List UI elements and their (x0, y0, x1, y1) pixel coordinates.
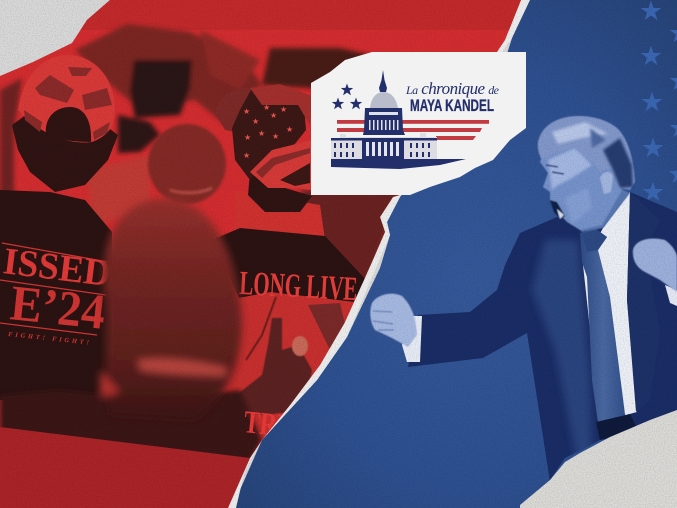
left man dark T-shirt (0, 190, 112, 400)
head (538, 116, 635, 232)
shirt slogan left: ISSED (1, 240, 113, 295)
stars column (639, 0, 677, 208)
left man hair (12, 112, 118, 192)
stars column: ★ (641, 133, 665, 164)
left fist (370, 294, 417, 347)
chronique heading: La chronique de (405, 79, 500, 98)
suit lighter front (532, 240, 592, 465)
torn white paper strip (224, 0, 530, 508)
shirt slogan left: E’24 (8, 274, 108, 340)
cap stars: ★ (263, 103, 270, 112)
capitol building (331, 70, 466, 169)
shirt (583, 192, 637, 422)
cap stars: ★ (243, 151, 250, 160)
cap stars (243, 103, 293, 160)
shirt graphic flag (308, 303, 345, 349)
panel: blue background (232, 0, 677, 508)
neck (565, 185, 630, 232)
shirt slogan right: LONG LIVE (239, 265, 358, 308)
cap stars: ★ (270, 111, 277, 120)
shirt graphic figure (230, 297, 312, 415)
lower red area (0, 427, 250, 508)
ear (600, 172, 613, 194)
logo card (311, 52, 526, 195)
stars column: ★ (640, 87, 664, 118)
hair (538, 116, 635, 190)
cap stars: ★ (244, 133, 251, 142)
torn paper bottom right (520, 410, 677, 508)
shirt lower text: TRU (242, 403, 296, 444)
right man neck and shirt (304, 202, 324, 236)
top red band (80, 0, 521, 30)
author name: MAYA KANDEL (410, 97, 494, 115)
shirt slogan left: FIGHT! FIGHT! (8, 331, 91, 347)
stars column: ★ (641, 177, 665, 208)
cap stars: ★ (258, 129, 265, 138)
card paper (311, 52, 526, 195)
cap stars: ★ (280, 105, 287, 114)
left man cap (18, 55, 115, 143)
left cuff (402, 316, 422, 362)
stars logo (332, 84, 362, 109)
belt (596, 414, 637, 440)
shirt slogan left (0, 240, 113, 347)
right man hair (248, 172, 312, 212)
panel: red crowd photo (0, 0, 521, 508)
background crowd shapes (0, 24, 400, 290)
face (540, 138, 622, 230)
right cuff (665, 285, 677, 306)
stars column: ★ (639, 41, 663, 72)
figure: man in suit (408, 192, 677, 482)
right lapel (627, 194, 637, 412)
dark lower shoulders (0, 390, 262, 462)
right fist (633, 238, 677, 292)
cap stars: ★ (243, 107, 250, 116)
eye (546, 165, 564, 174)
cap stars: ★ (272, 132, 279, 141)
suit (408, 192, 677, 482)
right man dark T-shirt (212, 228, 368, 304)
tie (580, 229, 626, 422)
red stripes (337, 120, 489, 140)
right man cap (215, 84, 312, 190)
cap stars: ★ (286, 125, 293, 134)
open mouth (550, 200, 565, 220)
cap stars: ★ (252, 117, 259, 126)
foreground blurred head (100, 198, 242, 420)
middle hat blurred (148, 124, 226, 204)
